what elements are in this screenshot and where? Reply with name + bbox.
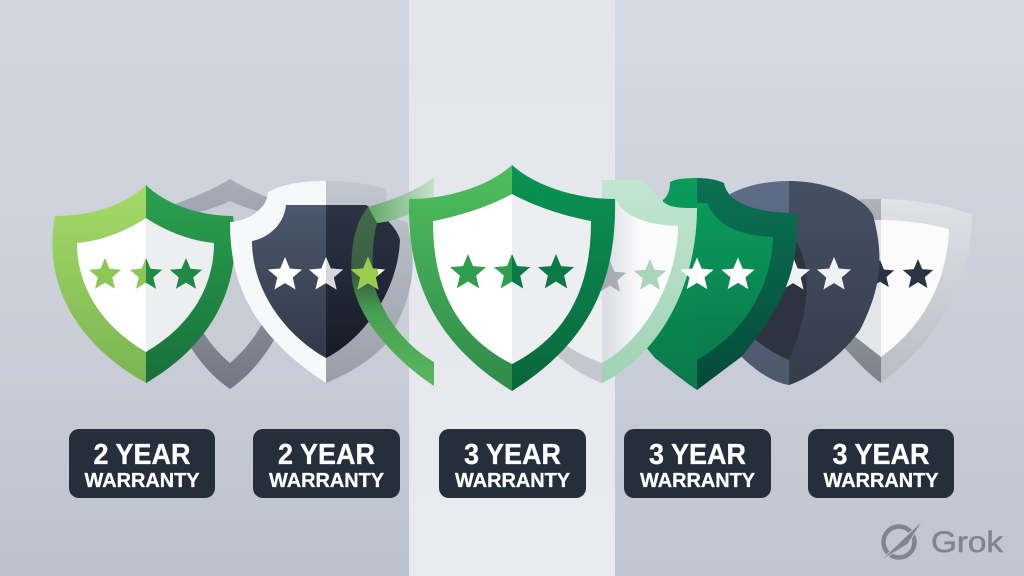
stars: dark shield — [268, 257, 343, 290]
label: 2 year warranty second: 2 YEAR — [278, 439, 375, 471]
label: 3 year warranty fifth — [808, 429, 954, 498]
shield: mint and white 3 year — [540, 180, 697, 383]
stars: dark green shield — [680, 258, 755, 289]
label: 2 year warranty: WARRANTY — [84, 469, 200, 492]
stars: slate shield — [776, 257, 851, 290]
shield: gray back outline — [172, 179, 290, 389]
background left panel — [0, 0, 409, 576]
shield: lime green 2 year — [52, 185, 235, 383]
logo: Grok watermark — [880, 520, 1004, 561]
shield: dark green 3 year — [640, 178, 797, 390]
logo: Grok watermark: Grok — [931, 526, 1004, 559]
stars: white shield — [866, 259, 933, 288]
shield: white and dark 2 year — [230, 181, 413, 383]
label: 3 year warranty center: WARRANTY — [455, 469, 570, 492]
shield: white and gray 3 year — [842, 199, 972, 383]
label: 2 year warranty second — [253, 429, 400, 498]
label: 2 year warranty — [69, 429, 215, 498]
label: 3 year warranty fourth: 3 YEAR — [649, 439, 746, 471]
label: 3 year warranty fourth — [624, 429, 771, 498]
label: 2 year warranty: 2 YEAR — [94, 439, 191, 471]
shield: slate 3 year — [730, 181, 879, 385]
stars: main shield — [450, 254, 574, 288]
label: 3 year warranty fourth: WARRANTY — [640, 469, 755, 492]
label: 3 year warranty fifth: WARRANTY — [824, 469, 939, 492]
label: 3 year warranty fifth: 3 YEAR — [832, 439, 930, 471]
stars: mint shield — [594, 259, 666, 292]
label: 3 year warranty center — [439, 429, 586, 498]
stars: lime shield — [89, 258, 202, 289]
shield: main green 3 year — [409, 165, 615, 391]
background right panel — [615, 0, 1024, 576]
label: 2 year warranty second: WARRANTY — [269, 469, 384, 492]
background center panel — [409, 0, 615, 576]
label: 3 year warranty center: 3 YEAR — [464, 439, 561, 471]
shield: translucent green arc — [351, 177, 434, 386]
